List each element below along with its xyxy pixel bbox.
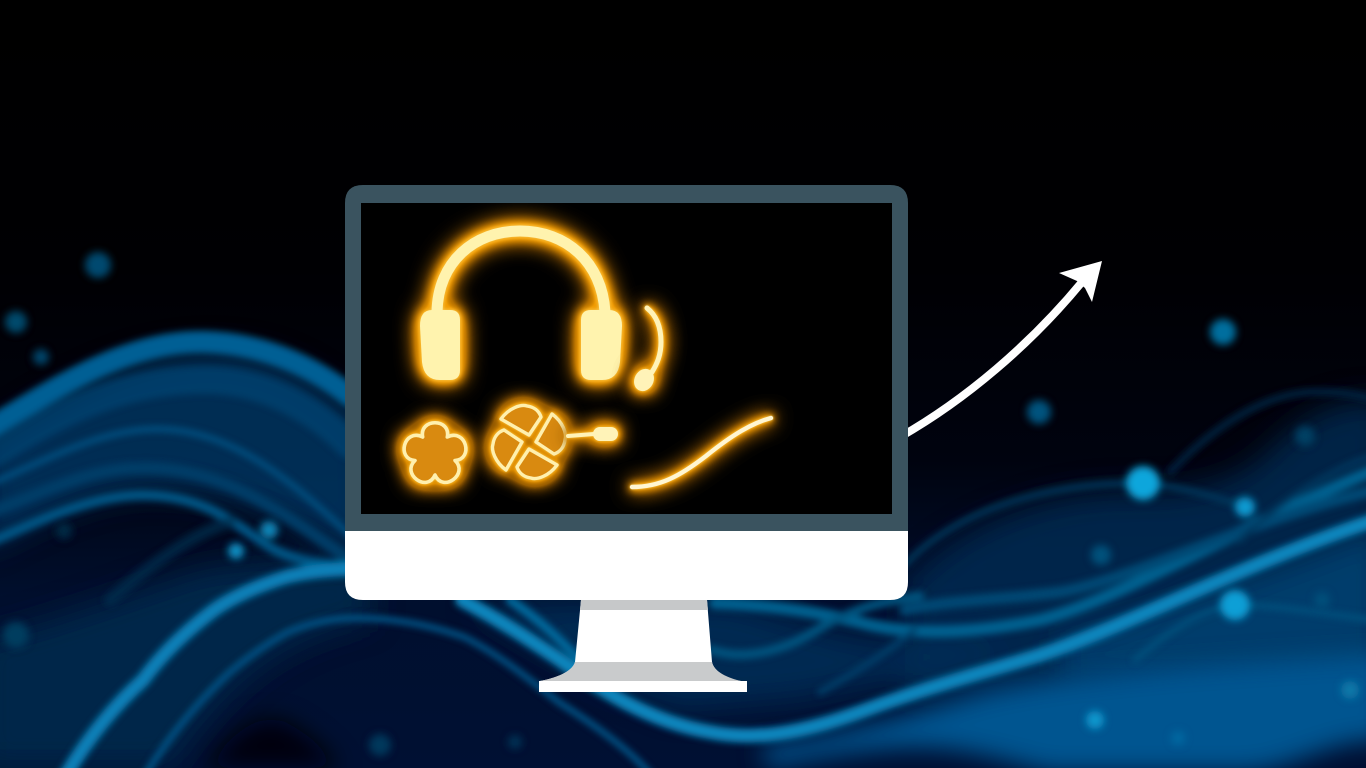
icon: headset [420,231,622,380]
background: central and right flowing waves [462,392,1366,736]
monitor [345,185,908,692]
monitor screen [361,203,892,514]
icon: flower [404,423,466,482]
background: glowing nodes [3,252,1359,756]
monitor bezel [345,185,908,531]
background: bottom right blue mass [760,654,1366,768]
icon: small microphone [568,427,618,441]
monitor stand [539,600,747,692]
monitor chin [345,531,908,600]
arrow: upward growth [900,261,1102,437]
icon: headset microphone boom [630,308,661,395]
icon: cable [632,418,771,487]
background: soft blue glow masses [0,350,1366,768]
background: left flowing waves [0,342,651,768]
background: dark patch lower left [205,719,340,768]
icon: fan [493,406,565,478]
